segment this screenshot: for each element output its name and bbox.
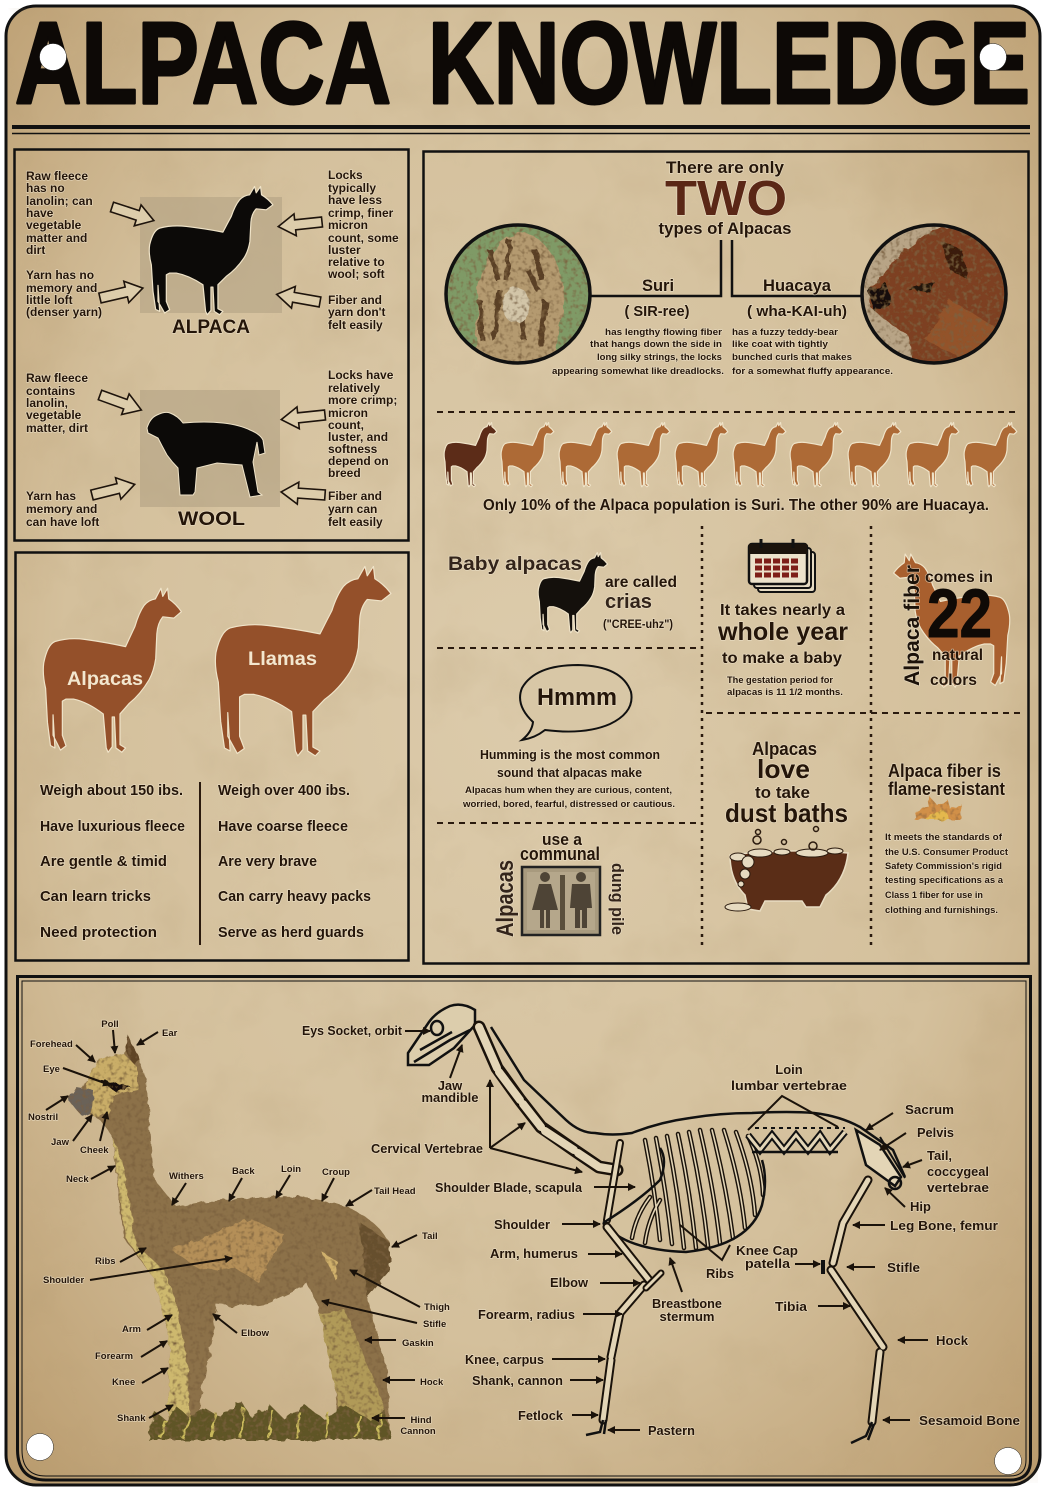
alpaca left notes (26, 169, 102, 319)
fact: 22 colors: natural (932, 647, 983, 664)
photo labels (28, 1019, 450, 1437)
fact: flame resistant (885, 761, 1009, 916)
icon: fiber alpaca (894, 554, 1010, 687)
photo labels: Elbow (241, 1328, 270, 1339)
suri description: appearing somewhat like dreadlocks. (552, 366, 724, 376)
label: huacaya (747, 277, 847, 320)
skeleton labels: Ribs (706, 1266, 734, 1281)
population caption: Only 10% of the Alpaca population is Suri. The other 90% are Huacaya. (483, 497, 989, 514)
alpaca right notes: typically (328, 181, 376, 195)
alpaca left notes: Yarn has no (26, 268, 94, 282)
fact: flame resistant: flame-resistant (888, 779, 1005, 799)
skeleton labels: Cervical Vertebrae (371, 1141, 483, 1156)
rib cage (603, 1130, 765, 1252)
fact: 22 colors: comes in (925, 569, 993, 586)
huacaya description: for a somewhat fluffy appearance. (732, 366, 893, 376)
skeleton labels: Shank, cannon (472, 1373, 563, 1388)
fact: gestation: whole year (717, 618, 848, 646)
skeleton labels: vertebrae (927, 1180, 989, 1195)
fact: flame resistant: Safety Commission's rigid (885, 861, 1002, 872)
alpaca right notes: felt easily (328, 318, 383, 332)
huacaya description: bunched curls that makes (732, 352, 852, 362)
skeleton labels: Shoulder Blade, scapula (435, 1180, 583, 1195)
llama traits: Can carry heavy packs (218, 888, 371, 905)
alpaca traits: Need protection (40, 924, 157, 941)
fact: flame resistant: Class 1 fiber for use in (885, 890, 983, 901)
skeleton labels: Sacrum (905, 1102, 954, 1117)
wool left notes: memory and (26, 502, 97, 516)
suri description: long silky strings, the locks (597, 352, 722, 362)
label: alpaca: ALPACA (172, 316, 250, 338)
skeleton labels: Tibia (775, 1299, 808, 1314)
suri description: has lengthy flowing fiber (605, 327, 723, 337)
panel: alpacas vs llamas (16, 552, 408, 960)
photo: suri (444, 223, 592, 365)
skeleton labels: Shoulder (494, 1217, 550, 1232)
photo labels: Poll (101, 1019, 119, 1030)
skeleton labels: Fetlock (518, 1408, 564, 1423)
skeleton labels: Breastbone (652, 1296, 722, 1311)
wool arrows (89, 385, 326, 506)
alpaca right notes: micron (328, 218, 368, 232)
label: huacaya: Huacaya (763, 277, 832, 295)
skeleton labels: stermum (660, 1309, 714, 1324)
skeleton labels: Knee, carpus (465, 1352, 544, 1367)
photo labels: Knee (112, 1377, 135, 1388)
fact: 22 colors: Alpaca fiber (901, 565, 924, 686)
fact: crias: ("CREE-uhz") (603, 619, 673, 631)
fact: humming: worried, bored, fearful, distressed or cautious. (462, 799, 675, 810)
photo labels: Forearm (95, 1351, 133, 1362)
alpaca left notes: (denser yarn) (26, 305, 102, 319)
fact: humming: Humming is the most common (480, 748, 660, 762)
alpaca right notes: crimp, finer (328, 206, 394, 220)
neck vertebrae (479, 1027, 617, 1170)
alpaca traits: Are gentle & timid (40, 853, 167, 870)
alpaca arrows (98, 197, 323, 313)
fact: gestation: The gestation period for (727, 675, 833, 686)
icon: speech bubble (520, 665, 632, 740)
skeleton labels: patella (745, 1256, 791, 1271)
fact: dust baths: love (757, 754, 810, 784)
wool left notes: Raw fleece (26, 371, 88, 385)
fact: communal dung pile: dung pile (608, 863, 627, 935)
alpaca left notes: Raw fleece (26, 169, 88, 183)
photo labels: Arm (122, 1324, 141, 1335)
lumbar spine (748, 1128, 845, 1152)
divider (199, 782, 201, 945)
wool right notes: count, (328, 418, 364, 432)
wool right notes: Locks have (328, 368, 394, 382)
fact: flame resistant: It meets the standards of (885, 832, 1003, 843)
photo labels: Croup (322, 1167, 350, 1178)
photo labels: Tail (422, 1231, 438, 1242)
scapula (607, 1143, 620, 1220)
wool left notes: Yarn has (26, 489, 76, 503)
alpaca left notes: lanolin; can (26, 194, 93, 208)
huacaya description: like coat with tightly (732, 339, 828, 349)
alpaca left notes: dirt (26, 243, 45, 257)
llama traits: Are very brave (218, 853, 317, 870)
skeleton labels: Eys Socket, orbit (302, 1023, 403, 1038)
photo labels: Neck (66, 1174, 89, 1185)
photo label arrows (46, 1030, 420, 1418)
icon: baby alpaca (538, 553, 608, 633)
wool right notes: relatively (328, 381, 380, 395)
alpaca right notes: yarn don't (328, 305, 386, 319)
wool right notes: micron (328, 406, 368, 420)
photo labels: Cannon (400, 1426, 436, 1437)
photo labels: Cheek (80, 1145, 109, 1156)
title rule (12, 127, 1030, 134)
skeleton labels: Stifle (887, 1260, 920, 1275)
alpaca left notes: has no (26, 181, 65, 195)
fact: communal dung pile: Alpacas (492, 860, 519, 937)
photo labels: Shoulder (43, 1275, 84, 1286)
fact: crias (448, 553, 677, 633)
fact: dust baths: to take (755, 783, 810, 802)
fact: gestation: alpacas is 11 1/2 months. (727, 687, 843, 698)
fact: crias: crias (605, 591, 652, 613)
wool right notes: softness (328, 442, 378, 456)
skeleton labels (302, 1023, 1020, 1438)
icon: restroom (522, 867, 600, 935)
icon: calendar (749, 539, 815, 592)
photo: huacaya (860, 220, 1010, 370)
hind leg (823, 1180, 883, 1443)
wool right notes: luster, and (328, 430, 388, 444)
body contour (491, 1027, 905, 1177)
wool right notes: yarn can (328, 502, 377, 516)
photo labels: Back (232, 1166, 255, 1177)
alpaca traits: Weigh about 150 ibs. (40, 782, 183, 799)
fact: flame resistant: Alpaca fiber is (888, 761, 1001, 781)
alpaca left notes: vegetable (26, 218, 82, 232)
label: suri: Suri (642, 277, 674, 295)
fact: 22 colors: 22 (927, 575, 992, 652)
wool left notes: matter, dirt (26, 421, 88, 435)
photo labels: Shank (117, 1413, 146, 1424)
label: wool: WOOL (178, 508, 245, 530)
fact: humming: Alpacas hum when they are curious, content, (465, 785, 672, 796)
fact: 22 colors: colors (930, 672, 977, 689)
fact: humming: Hmmm (537, 684, 617, 711)
fact: crias: Baby alpacas (448, 554, 582, 575)
label: suri (624, 277, 690, 320)
wool right notes: Fiber and (328, 489, 382, 503)
title (15, 0, 1030, 128)
fact: flame resistant: clothing and furnishings. (885, 905, 998, 916)
llama traits: Have coarse fleece (218, 818, 348, 835)
alpaca right notes: count, some (328, 231, 399, 245)
alpaca silhouette (140, 186, 282, 315)
photo labels: Thigh (424, 1302, 450, 1313)
wool left notes: vegetable (26, 408, 82, 422)
label: suri: ( SIR-ree) (624, 303, 690, 320)
photo labels: Eye (43, 1064, 60, 1075)
photo labels: Nostril (28, 1112, 58, 1123)
skeleton labels: Hock (936, 1333, 969, 1348)
icon: bathtub (725, 826, 848, 911)
skeleton labels: Knee Cap (736, 1243, 798, 1258)
fact: humming (462, 665, 675, 810)
photo labels: Hock (420, 1377, 444, 1388)
dashed dividers (437, 412, 1020, 950)
suri description: that hangs down the side in (590, 339, 722, 349)
title: ALPACA (15, 0, 391, 128)
panel: anatomy (18, 976, 1030, 1480)
photo labels: Ribs (95, 1256, 116, 1267)
alpaca right notes: Fiber and (328, 293, 382, 307)
panel: alpaca facts (424, 152, 1028, 964)
alpaca right notes: Locks (328, 168, 363, 182)
huacaya description: has a fuzzy teddy-bear (732, 327, 839, 337)
fact: communal dung pile: use a (542, 830, 582, 849)
fact: gestation: to make a baby (722, 650, 842, 667)
photo labels: Ear (162, 1028, 178, 1039)
alpaca right notes: luster (328, 243, 361, 257)
skeleton (408, 1005, 905, 1443)
sheep silhouette (140, 390, 280, 507)
skull (408, 1005, 475, 1065)
wool left notes (26, 371, 99, 529)
connector lines (591, 240, 861, 296)
fact: communal dung pile (492, 830, 627, 937)
alpaca photo (68, 1035, 392, 1440)
panel: alpaca vs wool fiber (14, 150, 408, 540)
alpaca left notes: have (26, 206, 54, 220)
fact: gestation (717, 539, 848, 698)
fact: gestation: It takes nearly a (720, 602, 845, 619)
skeleton labels: Tail, (927, 1148, 952, 1163)
llama traits (218, 782, 371, 941)
icon: flame (915, 797, 962, 820)
skeleton labels: Arm, humerus (490, 1246, 578, 1261)
fact: flame resistant: testing specifications as a (885, 875, 1004, 886)
photo labels: Hind (410, 1415, 432, 1426)
wool right notes: breed (328, 466, 361, 480)
fact: flame resistant: the U.S. Consumer Product (885, 847, 1009, 858)
wool right notes: depend on (328, 454, 389, 468)
skeleton labels: Leg Bone, femur (890, 1218, 998, 1233)
skeleton labels: Jaw (438, 1078, 463, 1093)
wool right notes (328, 368, 397, 529)
skeleton arrows (405, 1031, 928, 1430)
skeleton labels: Sesamoid Bone (919, 1413, 1020, 1428)
label: alpacas: Alpacas (67, 669, 143, 690)
fact: communal dung pile: communal (520, 844, 600, 864)
fact: dust baths: dust baths (725, 798, 848, 828)
skeleton labels: coccygeal (927, 1164, 989, 1179)
skeleton labels: Loin (775, 1062, 803, 1077)
skeleton labels: Pelvis (917, 1125, 954, 1140)
wool right notes: more crimp; (328, 393, 397, 407)
alpaca left notes: matter and (26, 231, 87, 245)
fact: dust baths (725, 739, 848, 911)
front leg (586, 1227, 661, 1435)
fact: dust baths: Alpacas (752, 739, 817, 759)
photo labels: Jaw (51, 1137, 70, 1148)
llama brown silhouette (215, 566, 391, 756)
suri description (552, 327, 724, 376)
alpaca left notes: little loft (26, 293, 73, 307)
heading: two types: types of Alpacas (658, 219, 792, 238)
fact: humming: sound that alpacas make (497, 766, 642, 780)
skeleton labels: Forearm, radius (478, 1307, 575, 1322)
skeleton labels: lumbar vertebrae (731, 1078, 847, 1093)
alpaca traits: Have luxurious fleece (40, 818, 185, 835)
pelvis (856, 1130, 905, 1189)
wool right notes: felt easily (328, 515, 383, 529)
wool left notes: can have loft (26, 515, 99, 529)
photo labels: Forehead (30, 1039, 73, 1050)
alpaca left notes: memory and (26, 281, 97, 295)
skeleton labels: mandible (421, 1090, 479, 1105)
alpaca right notes: have less (328, 193, 382, 207)
alpaca traits (40, 782, 185, 941)
photo labels: Loin (281, 1164, 301, 1175)
alpaca population row (444, 423, 1017, 487)
llama traits: Serve as herd guards (218, 924, 364, 941)
huacaya description (732, 327, 893, 376)
alpaca traits: Can learn tricks (40, 888, 151, 905)
fact: crias: are called (605, 574, 677, 591)
skeleton labels: Hip (910, 1199, 931, 1214)
fact: 22 colors (894, 554, 1010, 689)
alpaca brown silhouette (43, 588, 181, 752)
wool left notes: lanolin, (26, 396, 68, 410)
photo labels: Gaskin (402, 1338, 434, 1349)
label: llamas: Llamas (248, 649, 317, 670)
photo labels: Stifle (423, 1319, 446, 1330)
llama traits: Weigh over 400 ibs. (218, 782, 350, 799)
alpaca right notes (327, 168, 399, 332)
heading: two types (658, 158, 792, 238)
skeleton labels: Elbow (550, 1275, 589, 1290)
skeleton labels: Pastern (648, 1423, 695, 1438)
alpaca right notes: wool; soft (327, 267, 385, 281)
photo labels: Tail Head (374, 1186, 416, 1197)
heading: two types: There are only (666, 158, 785, 177)
wool left notes: contains (26, 384, 76, 398)
label: huacaya: ( wha-KAI-uh) (747, 303, 847, 320)
heading: two types: TWO (665, 172, 787, 226)
alpaca right notes: relative to (328, 255, 385, 269)
photo labels: Withers (169, 1171, 204, 1182)
